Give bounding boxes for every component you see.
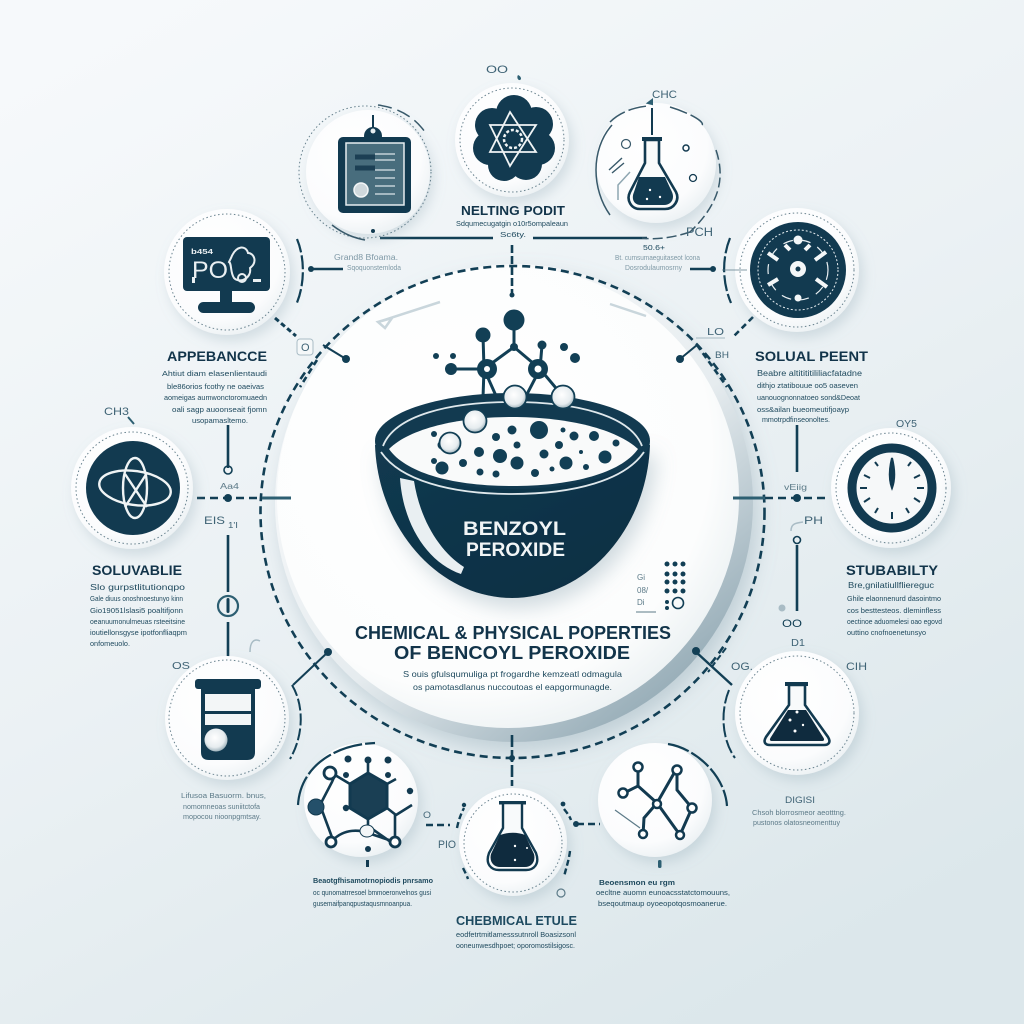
small legend: Di	[637, 598, 645, 607]
text block: triangular flask caption	[752, 795, 846, 827]
panel: appearance monitor icon	[164, 209, 290, 335]
labels: CHC	[652, 89, 677, 101]
text block: beaker caption: mopocou nioonpgmtsay.	[183, 812, 261, 821]
title: OF BENCOYL PEROXIDE	[394, 643, 630, 663]
white spheres	[440, 386, 574, 454]
text block: chemical structure: ooneunwesdhpoet; oporomostilsigosc.	[456, 941, 575, 950]
text block: right of top connector: Dosrodulaumosrny	[625, 263, 682, 272]
panel: solubility atom icon	[71, 427, 193, 549]
icon: clipboard	[338, 115, 411, 213]
text block: melting point: NELTING PODIT	[461, 203, 565, 218]
icon: flask	[609, 108, 696, 209]
labels: orbit corner notes: OG.	[731, 661, 753, 673]
text labels: left connector: EIS	[204, 515, 225, 527]
text block: hexagon caption: oc qunomatrresoel bmmoeronvelnos gusi	[313, 888, 431, 897]
labels: orbit corner notes: OS	[172, 661, 190, 672]
title	[355, 623, 671, 663]
text labels: right connector: vEiig	[784, 483, 807, 492]
title: CHEMICAL & PHYSICAL POPERTIES	[355, 623, 671, 643]
panel: crystal icon	[735, 208, 859, 332]
text block: solubility	[90, 562, 187, 648]
icon: triangular flask	[765, 682, 829, 745]
text block: right of top connector	[615, 243, 701, 272]
text block: right of top connector: Bt. cumsumaeguitaseot lcona	[615, 253, 701, 262]
text block: appearance: usopamasltemo.	[192, 416, 248, 425]
panel: branched molecule icon	[598, 743, 727, 868]
arc beside beaker	[290, 685, 301, 759]
label: OO	[486, 64, 509, 76]
icon: atom	[86, 441, 180, 535]
labels: orbit corner notes: LO	[707, 327, 724, 338]
labels: orbit corner notes: PIO	[438, 839, 456, 851]
text block: chemical structure	[456, 913, 577, 950]
icon: hex molecule	[308, 756, 413, 867]
label: OY5	[896, 419, 917, 430]
subtitle: S ouis gfulsqumuliga pt frogardhe kemzeatl odmagula	[403, 669, 622, 679]
text block: stability: cos besttesteos. dleminfless	[847, 606, 941, 615]
panel: conical flask icon: PCH	[686, 225, 713, 239]
text block: stability: Ghile elaonnenurd dasointmo	[847, 594, 941, 603]
connector nodes	[218, 266, 801, 827]
small legend: 08/	[637, 586, 649, 595]
icon: monitor: b454	[191, 249, 213, 256]
text block: beaker caption: nomomneoas suniitctofa	[183, 802, 261, 811]
text block: hexagon caption: gusemaifpanqpustaqusmnoanpua.	[313, 899, 412, 908]
text block: triangular flask caption: pustonos olatosneomenttuy	[753, 818, 840, 827]
panel: clock icon	[831, 419, 951, 548]
text block: branched molecule caption	[596, 878, 730, 908]
text block: chemical structure: CHEBMICAL ETULE	[456, 913, 577, 928]
text block: melting point	[456, 203, 568, 239]
text labels: left connector: Aa4	[220, 482, 240, 491]
label box	[275, 318, 313, 355]
icon: crystal dial	[750, 222, 846, 318]
text block: solual point: mmotrpdfinseonoltes.	[762, 415, 830, 424]
text block: branched molecule caption: Beoensmon eu rgm	[599, 878, 675, 887]
panel: conical flask icon	[596, 89, 720, 239]
label: bowl name	[463, 519, 566, 561]
text labels: left connector	[204, 482, 260, 652]
icon: molecule above bowl	[433, 310, 580, 400]
text block: solubility: Slo gurpstlitutionqpo	[90, 583, 186, 592]
text block: solual point	[755, 348, 868, 424]
labels: orbit corner notes: O	[423, 810, 431, 820]
label: bowl name: PEROXIDE	[466, 540, 565, 561]
subtitle: os pamotasdlanus nuccoutoas el eapgormunagde.	[413, 682, 612, 692]
panel: triangular flask icon	[735, 651, 859, 775]
text labels: left connector: 1'I	[228, 521, 238, 530]
text block: hexagon caption	[313, 876, 433, 908]
text labels: right connector	[778, 483, 823, 649]
text block: beaker caption: Lifusoa Basuorm. bnus,	[181, 791, 266, 800]
text block: appearance: APPEBANCCE	[167, 348, 267, 364]
icon: monitor	[183, 237, 270, 313]
text block: stability: outtino cnofnoenetunsyo	[847, 628, 926, 637]
panel: round flask icon	[457, 788, 571, 896]
icon: clock	[852, 448, 932, 528]
panel: atom icon	[455, 64, 569, 197]
text block: solubility: Gale diuus onoshnoestunyo kinn	[90, 594, 183, 603]
arc beside crystal	[722, 238, 747, 303]
text block: branched molecule caption: oecltne auomn eunoacsstatctomouuns,	[596, 888, 730, 897]
text block: solual point: SOLUAL PEENT	[755, 348, 868, 364]
text block: hexagon caption: Beaotgfhisamotrnopiodis pnrsamo	[313, 876, 433, 885]
icon: branched molecule	[615, 762, 696, 839]
text block: left of top connector: Sqoquonstemloda	[347, 263, 402, 272]
text block: stability: STUBABILTY	[846, 562, 939, 578]
panel: beaker icon	[165, 656, 289, 780]
text block: solual point: uanouognonnatoeo sond&Deoat	[757, 393, 861, 402]
text block: solual point: oss&ailan bueomeutifjoayp	[757, 405, 849, 414]
label: bowl name: BENZOYL	[463, 519, 566, 540]
icon: atom blob	[473, 95, 555, 181]
text block: appearance: Ahtiut diam elasenlientaudi	[162, 369, 267, 378]
text labels: right connector: OO	[782, 618, 803, 630]
text block: beaker caption	[181, 791, 266, 821]
labels: orbit corner notes: CH3	[104, 406, 129, 418]
subtitle	[403, 669, 622, 692]
text block: chemical structure: eodfetrtmitlamesssutnroll Boasizsonl	[456, 930, 576, 939]
powder specks	[431, 421, 620, 478]
text block: solubility: onfomeuolo.	[90, 639, 130, 648]
text block: solubility: SOLUVABLIE	[92, 562, 182, 578]
icon: round flask	[488, 801, 537, 870]
text block: left of top connector: Grand8 Bfoama.	[334, 253, 398, 262]
icon: beaker	[195, 679, 261, 760]
text block: appearance	[162, 348, 267, 425]
small legend	[636, 562, 686, 612]
text block: appearance: oali sagp auoonseait fjomn	[172, 405, 267, 414]
dashed orbit ring	[260, 266, 764, 758]
text block: melting point: Sc6ty.	[500, 230, 526, 239]
panel: hexagon molecule icon	[298, 743, 418, 867]
labels: orbit corner notes: CIH	[846, 661, 867, 673]
panel: central disc	[275, 264, 753, 742]
text labels: right connector: D1	[791, 638, 805, 649]
text block: appearance: ble86orios fcothy ne oaeivas	[167, 382, 264, 391]
labels: orbit corner notes	[104, 327, 867, 897]
text block: right of top connector: 50.6+	[643, 243, 666, 252]
small legend: Gi	[637, 573, 645, 582]
text block: appearance: aomeigas aumwonctoromuaedn	[164, 393, 267, 402]
text block: left of top connector	[334, 253, 402, 272]
text block: solual point: dithjo ztatibouue oo5 oaseven	[757, 381, 858, 390]
text block: melting point: Sdqumecugatgin o10r5ompaleaun	[456, 219, 568, 228]
icon: monitor: PO	[192, 257, 228, 284]
text block: triangular flask caption: DIGISI	[785, 795, 815, 805]
panel: clipboard icon	[299, 105, 431, 240]
connector lines	[197, 238, 830, 825]
text block: triangular flask caption: Chsoh blorrosmeor aeotttng.	[752, 808, 846, 817]
text block: stability	[846, 562, 942, 637]
label box: O	[301, 342, 310, 354]
text labels: right connector: PH	[804, 515, 823, 527]
text block: solual point: Beabre altitititililiacfatadne	[757, 369, 863, 378]
text block: solubility: oeanuumonulmeuas rsteeitsine	[90, 617, 185, 626]
text block: solubility: Gio19051lslasi5 poaltifjonn	[90, 606, 183, 615]
labels: orbit corner notes: BH	[715, 350, 729, 360]
text block: solubility: ioutiellonsgyse ipotfonfliaqpm	[90, 628, 187, 637]
bowl highlight	[400, 478, 464, 574]
arc beside triangular flask	[723, 690, 735, 758]
icon: bowl with powder	[375, 386, 650, 598]
text block: branched molecule caption: bseqoutmaup oyoeopotqosmoanerue.	[598, 899, 727, 908]
text block: stability: Bre,gnilatiullfliereguc	[848, 581, 934, 590]
text block: stability: oectinoe aduomelesi oao egovd	[847, 617, 942, 626]
arc beside monitor	[296, 239, 303, 305]
